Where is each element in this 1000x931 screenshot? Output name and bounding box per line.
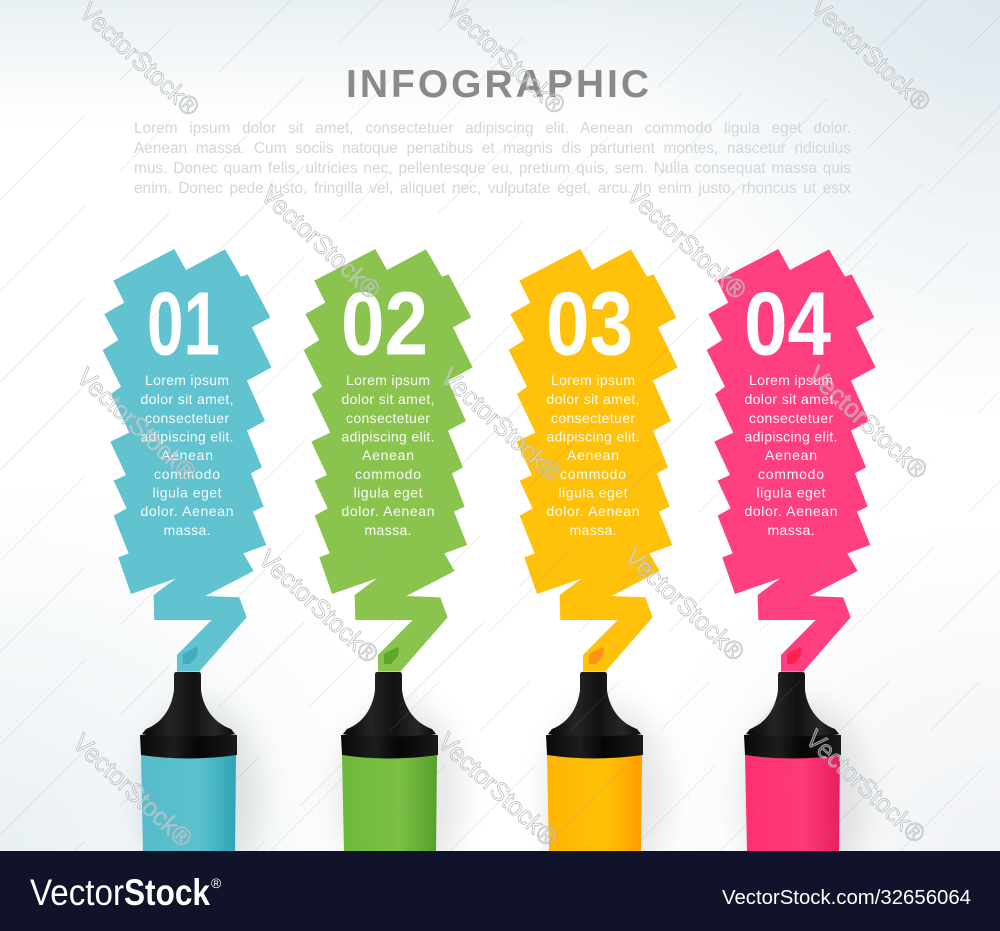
text block: consectetuer — [749, 410, 833, 426]
blob — [509, 249, 678, 672]
text block: adipiscing elit. — [342, 428, 434, 444]
watermarks — [67, 0, 936, 853]
marker collar — [140, 732, 237, 758]
number: 02 — [341, 274, 428, 374]
text block: massa. — [768, 522, 814, 538]
intro paragraph: Aenean massa. Cum sociis natoque penatibus et magnis dis parturient montes, nascetur ridiculus — [134, 140, 851, 157]
text block: ligula eget — [152, 484, 222, 500]
text block: massa. — [364, 522, 412, 538]
text block: adipiscing elit. — [140, 428, 234, 444]
blob — [304, 249, 473, 672]
text block: commodo — [154, 466, 220, 482]
text block: Aenean — [161, 447, 213, 463]
marker body — [141, 755, 236, 851]
nib — [589, 647, 604, 664]
text block: commodo — [355, 466, 421, 482]
text block: commodo — [560, 466, 626, 482]
text block: dolor sit amet, — [744, 391, 838, 407]
number: 03 — [546, 274, 633, 374]
text block: dolor. Aenean — [744, 503, 838, 519]
footer logo — [30, 872, 222, 913]
text block: dolor sit amet, — [546, 391, 640, 407]
number: 01 — [147, 274, 220, 374]
nib — [384, 647, 399, 664]
footer image id: VectorStock.com/32656064 — [722, 887, 971, 909]
text block: ligula eget — [354, 484, 423, 500]
marker body — [547, 755, 642, 851]
blob — [707, 249, 876, 672]
shadow — [544, 700, 668, 890]
text block: consectetuer — [551, 410, 635, 426]
panel: marker 2 — [304, 249, 473, 890]
intro paragraph — [134, 120, 851, 197]
text block: Aenean — [567, 447, 619, 463]
text block — [546, 372, 640, 538]
shadow — [339, 700, 463, 890]
text block: Lorem ipsum — [551, 372, 635, 388]
marker body — [745, 755, 840, 851]
text block: consectetuer — [145, 410, 229, 426]
watermarks: VectorStock® — [71, 361, 202, 487]
marker cap — [746, 672, 839, 736]
nib — [787, 647, 802, 664]
text block: Aenean — [362, 447, 414, 463]
text block: ligula eget — [558, 484, 628, 500]
watermarks: VectorStock® — [432, 726, 563, 852]
watermarks: VectorStock® — [253, 543, 384, 669]
text block: Lorem ipsum — [145, 372, 229, 388]
text block: dolor. Aenean — [546, 503, 640, 519]
watermarks: VectorStock® — [74, 0, 205, 122]
text block: adipiscing elit. — [744, 428, 838, 444]
text block: Aenean — [765, 447, 817, 463]
nib — [183, 647, 198, 664]
text block: adipiscing elit. — [546, 428, 640, 444]
marker collar — [744, 732, 841, 758]
intro paragraph: mus. Donec quam felis, ultricies nec, pellentesque eu, pretium quis, sem. Nulla consequat massa quis — [134, 160, 851, 177]
watermarks: VectorStock® — [800, 723, 931, 849]
marker collar — [546, 732, 643, 758]
panel: marker 3 — [509, 249, 678, 890]
text block — [342, 372, 434, 538]
shadow — [742, 700, 866, 890]
intro paragraph: Lorem ipsum dolor sit amet, consectetuer adipiscing elit. Aenean commodo ligula eget dolor. — [134, 120, 851, 136]
text block: dolor. Aenean — [140, 503, 234, 519]
text block: consectetuer — [346, 410, 430, 426]
watermarks: VectorStock® — [802, 359, 933, 485]
text block: Lorem ipsum — [749, 372, 833, 388]
blob — [103, 249, 272, 672]
text block — [140, 372, 234, 538]
marker collar — [341, 732, 438, 758]
marker cap — [548, 672, 641, 736]
text block: massa. — [570, 522, 616, 538]
marker body — [342, 755, 437, 851]
footer logo: Stock — [124, 872, 210, 913]
text block: dolor sit amet, — [140, 391, 234, 407]
text block: massa. — [164, 522, 210, 538]
panel: marker 1 — [103, 249, 272, 890]
watermarks: VectorStock® — [619, 541, 750, 667]
watermarks: VectorStock® — [255, 179, 386, 305]
shadow — [138, 700, 262, 890]
text block: dolor. Aenean — [342, 503, 434, 519]
text block: dolor sit amet, — [342, 391, 434, 407]
text block: Lorem ipsum — [346, 372, 430, 388]
watermarks: VectorStock® — [621, 179, 752, 305]
panel: marker 4 — [707, 249, 876, 890]
footer logo: ® — [211, 875, 222, 891]
number: 04 — [744, 274, 831, 374]
text block: ligula eget — [756, 484, 826, 500]
intro paragraph: enim. Donec pede justo, fringilla vel, aliquet nec, vulputate eget, arcu. In enim justo, rhoncus ut estx — [134, 180, 851, 197]
footer logo: Vector — [30, 872, 124, 913]
watermarks: VectorStock® — [435, 361, 566, 487]
marker cap — [142, 672, 235, 736]
marker cap — [343, 672, 436, 736]
watermarks: VectorStock® — [67, 727, 198, 853]
text block — [744, 372, 838, 538]
footer bar — [0, 851, 1000, 931]
title: INFOGRAPHIC — [346, 63, 649, 106]
text block: commodo — [758, 466, 824, 482]
